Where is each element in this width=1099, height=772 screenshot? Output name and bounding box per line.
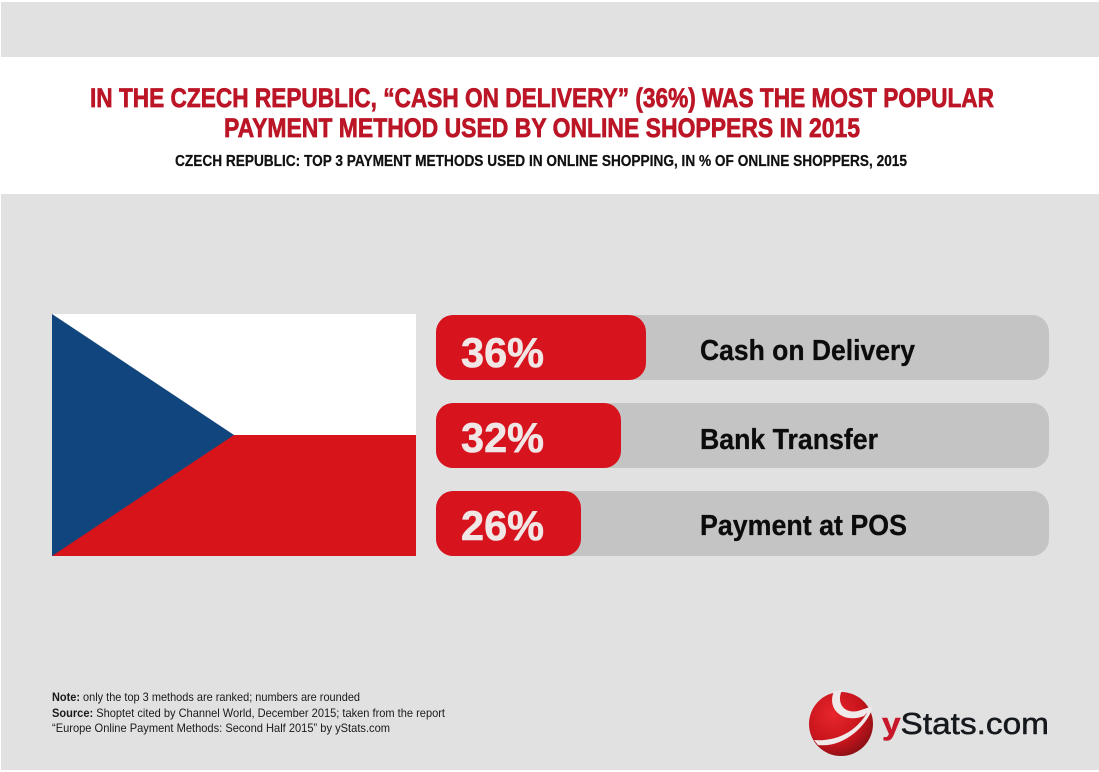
top band [1, 2, 1099, 57]
note and source: “Europe Online Payment Methods: Second Half 2015” by yStats.com [52, 721, 390, 735]
note and source [52, 690, 446, 735]
main background panel [1, 194, 1099, 770]
subtitle: CZECH REPUBLIC: TOP 3 PAYMENT METHODS USED IN ONLINE SHOPPING, IN % OF ONLINE SHOPPERS, 2015 [175, 153, 907, 170]
logo wordmark: yStats.com [882, 706, 1049, 741]
yStats logo [809, 690, 1049, 756]
icon: red globe with arrow [809, 690, 873, 756]
bar: Bank Transfer 32% [436, 403, 1049, 468]
bar: Cash on Delivery 36% [436, 315, 1049, 380]
Czech flag [52, 314, 416, 556]
note and source: Source: Shoptet cited by Channel World, December 2015; taken from the report [52, 706, 446, 720]
title: PAYMENT METHOD USED BY ONLINE SHOPPERS IN 2015 [224, 113, 860, 143]
bar: Payment at POS 26%: 26% [461, 502, 544, 549]
bar chart: payment methods [436, 315, 1049, 556]
title [90, 83, 994, 143]
bar: Cash on Delivery 36%: 36% [461, 329, 544, 376]
bar: Bank Transfer 32%: 32% [461, 414, 544, 461]
bar: Payment at POS 26% [436, 491, 1049, 556]
bar: Bank Transfer 32%: Bank Transfer [700, 424, 878, 456]
note and source: Note: only the top 3 methods are ranked; numbers are rounded [52, 690, 360, 704]
bar: Cash on Delivery 36%: Cash on Delivery [700, 335, 915, 367]
bar: Payment at POS 26%: Payment at POS [700, 510, 907, 542]
